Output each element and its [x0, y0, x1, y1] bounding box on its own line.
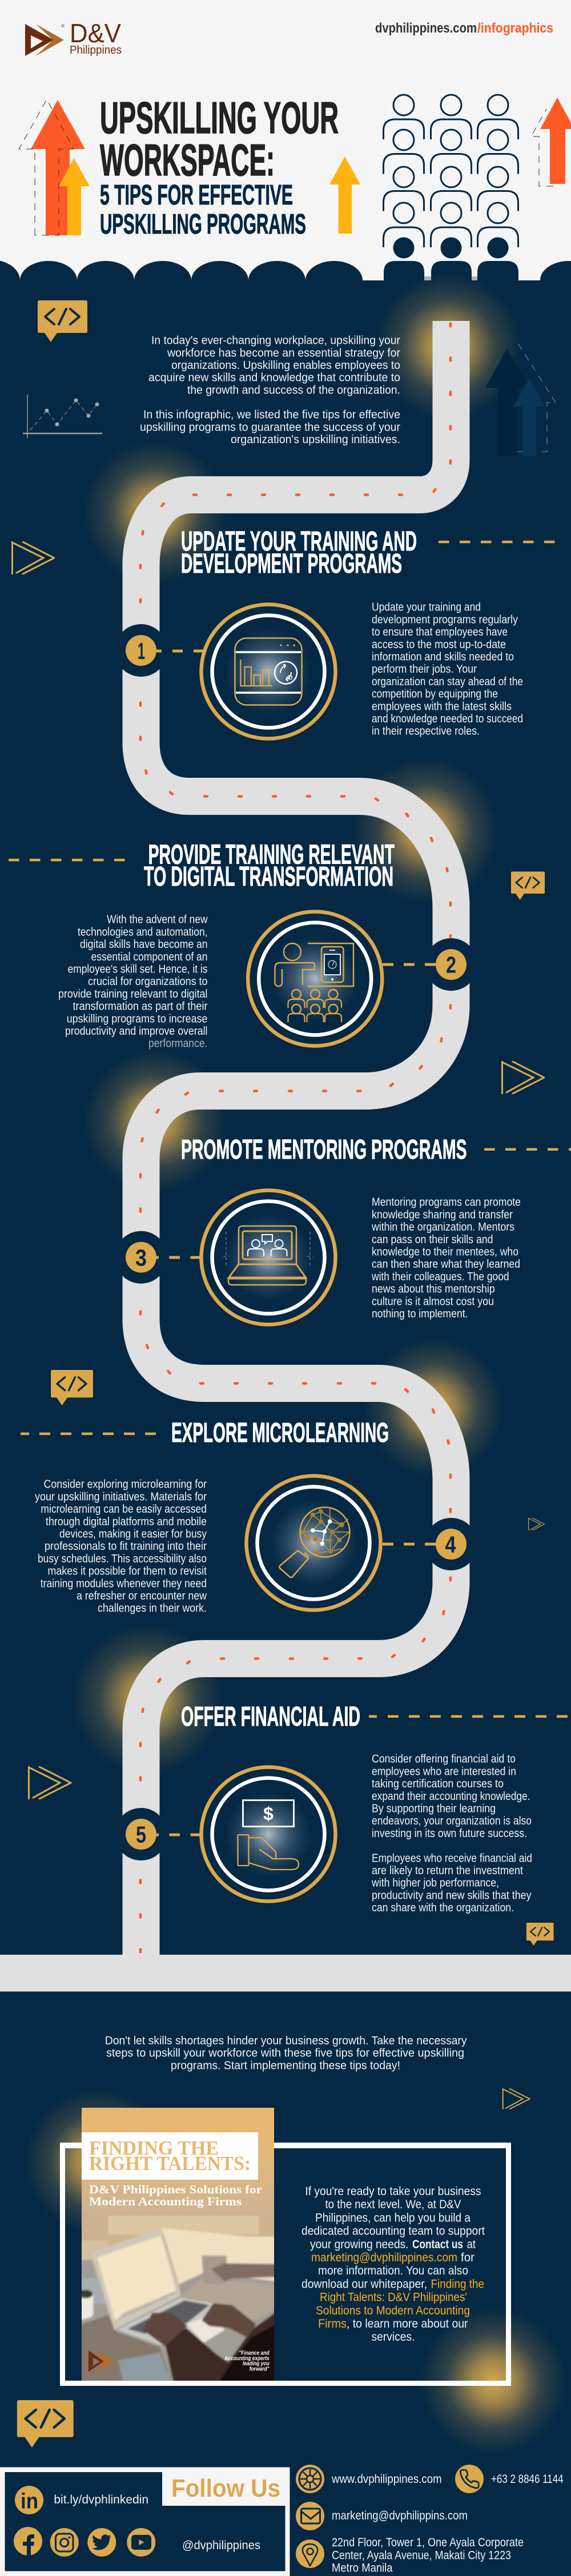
- website text: www.dvphilippines.com: [331, 2472, 442, 2486]
- cover title: RIGHT TALENTS:: [89, 2152, 251, 2175]
- intro text: acquire new skills and knowledge that contribute to: [148, 372, 400, 384]
- contact call-to-action text: [301, 2184, 485, 2344]
- contact call-to-action text: services.: [371, 2330, 415, 2344]
- icon: tip 5 financial aid: $: [263, 1803, 274, 1824]
- step 3 node: [115, 1231, 200, 1284]
- arrow centre: [329, 156, 360, 234]
- contact call-to-action text: at: [467, 2237, 476, 2251]
- scalloped ground: [0, 260, 571, 286]
- arrows left: [19, 99, 90, 235]
- intro text: organization's upskilling initiatives.: [231, 433, 400, 446]
- contact call-to-action text: your growing needs.: [310, 2237, 409, 2251]
- title: WORKSPACE:: [100, 135, 275, 185]
- body: tip 4: training modules whenever they need: [41, 1577, 207, 1590]
- icon: tip 2 teacher and audience: [248, 911, 382, 1046]
- contact call-to-action text: , to learn more about our: [347, 2317, 468, 2330]
- step 2 node: 2: [446, 951, 456, 978]
- people grid: [384, 95, 518, 283]
- heading: tip 5: OFFER FINANCIAL AID: [181, 1702, 360, 1732]
- cover subtitle: Modern Accounting Firms: [89, 2195, 242, 2208]
- contact call-to-action text: download our whitepaper,: [301, 2277, 427, 2290]
- body: tip 2: [58, 914, 208, 1050]
- cover photo: [82, 2216, 274, 2381]
- body: tip 2: provide training relevant to digital: [58, 988, 208, 1000]
- address text: Metro Manila: [332, 2561, 393, 2575]
- icon: linkedin: [15, 2486, 43, 2514]
- icon: instagram: [50, 2528, 79, 2557]
- body: tip 1: in their respective roles.: [372, 725, 480, 738]
- body: tip 4: busy schedules. This accessibility also: [38, 1553, 207, 1565]
- intro text: In this infographic, we listed the five tips for effective: [143, 409, 400, 421]
- cover title: [89, 2137, 251, 2175]
- body: tip 3: news about this mentorship: [372, 1283, 495, 1296]
- body: tip 5: productivity and new skills that they: [372, 1889, 531, 1902]
- linkedin link: bit.ly/dvphlinkedin: [54, 2493, 148, 2506]
- icon: phone: [455, 2465, 484, 2493]
- website url: /infographics: [477, 21, 553, 36]
- body: tip 4: makes it possible for them to revisit: [48, 1565, 207, 1578]
- logo: [25, 18, 122, 57]
- body: tip 2: technologies and automation,: [78, 926, 208, 938]
- address text: Center, Ayala Avenue, Makati City 1223: [332, 2549, 511, 2562]
- step 1 node: 1: [138, 638, 145, 664]
- icon: code bubble 4: [526, 1923, 554, 1946]
- icon: chevrons 5: [503, 2089, 530, 2109]
- body: tip 1: access to the most up-to-date: [372, 638, 506, 651]
- body: tip 1: competition by equipping the: [372, 688, 498, 701]
- title: UPSKILLING YOUR: [100, 93, 339, 143]
- body: tip 4: through digital platforms and mobile: [46, 1516, 207, 1528]
- cover logo: [89, 2350, 115, 2372]
- icon: facebook: [14, 2527, 42, 2555]
- body: tip 2: digital skills have become an: [80, 938, 208, 951]
- body: tip 4: microlearning can be easily accessed: [41, 1503, 207, 1516]
- body: tip 5: employees who are interested in: [372, 1765, 516, 1778]
- white frame: [60, 2143, 511, 2386]
- closing text: [105, 2035, 467, 2072]
- icon: tip 3 mentoring laptop: [201, 1190, 336, 1325]
- website url: [375, 21, 553, 36]
- step 4 node: [383, 1518, 477, 1570]
- body: tip 4: devices, making it easier for busy: [59, 1528, 207, 1541]
- icon: code bubble 5: [17, 2400, 74, 2448]
- body: tip 5: taking certification courses to: [372, 1778, 504, 1790]
- address text: 22nd Floor, Tower 1, One Ayala Corporate: [332, 2535, 524, 2549]
- whitepaper cover: [82, 2108, 274, 2381]
- icon: line chart: [23, 395, 102, 438]
- icon: twitter: [87, 2528, 116, 2557]
- contact call-to-action text: Contact us: [412, 2237, 463, 2251]
- contact call-to-action text: for: [461, 2251, 475, 2264]
- icon: website: [296, 2465, 324, 2493]
- step 3 node: 3: [135, 1245, 147, 1271]
- body: tip 2: employee's skill set. Hence, it is: [68, 963, 207, 975]
- intro text: upskilling programs to guarantee the success of your: [140, 421, 400, 433]
- step 2 node: [383, 938, 477, 991]
- body: tip 3: culture is it almost cost you: [372, 1295, 494, 1308]
- follow us heading: Follow Us: [171, 2474, 280, 2502]
- body: tip 1: organization can stay ahead of the: [372, 676, 523, 688]
- icon: tip 1 training dashboard: [201, 604, 336, 739]
- icon: tip 4 magnifier network: [247, 1476, 380, 1610]
- icon: tip 5 financial aid: [201, 1767, 336, 1902]
- body: tip 3: can then share what they learned: [372, 1258, 520, 1271]
- intro text: workforce has become an essential strategy for: [167, 347, 400, 359]
- icon: chevrons 2: [502, 1062, 544, 1094]
- icon: chevrons 4: [29, 1767, 71, 1799]
- body: tip 3: knowledge sharing and transfer: [372, 1208, 513, 1221]
- closing text: Don't let skills shortages hinder your business growth. Take the necessary: [105, 2035, 467, 2047]
- icon: email: [296, 2502, 324, 2530]
- cover tagline: "Finance and: [239, 2350, 270, 2356]
- body: tip 3: with their colleagues. The good: [371, 1271, 509, 1283]
- step 4 node: 4: [445, 1532, 456, 1558]
- cover tagline: forward": [250, 2366, 270, 2372]
- body: tip 5: expand their accounting knowledge.: [372, 1790, 530, 1803]
- logo: Philippines: [70, 44, 122, 57]
- cover title: FINDING THE: [89, 2137, 219, 2159]
- contact call-to-action text: Finding the: [431, 2277, 484, 2290]
- body: tip 1: to ensure that employees have: [372, 626, 508, 638]
- contact call-to-action text: Solutions to Modern Accounting: [316, 2304, 470, 2317]
- panel: contact details: [296, 2465, 564, 2575]
- contact call-to-action text: more information. You can also: [318, 2264, 468, 2277]
- road centre dashes: [140, 323, 451, 1952]
- body: tip 2: productivity and improve overall: [65, 1025, 208, 1038]
- body: tip 3: within the organization. Mentors: [371, 1221, 514, 1233]
- heading: tip 4: EXPLORE MICROLEARNING: [171, 1418, 389, 1448]
- intro text: the growth and success of the organization.: [187, 384, 400, 396]
- body: tip 1: perform their jobs. Your: [372, 663, 477, 676]
- icon: chevrons 3: [529, 1518, 545, 1530]
- body: tip 1: [372, 601, 523, 738]
- body: tip 1: Update your training and: [372, 601, 481, 614]
- contact call-to-action text: dedicated accounting team to support: [301, 2224, 485, 2238]
- winding road: [0, 321, 571, 1992]
- cover subtitle: [89, 2183, 262, 2208]
- body: tip 1: and knowledge needed to succeed: [372, 713, 523, 725]
- body: tip 4: [35, 1478, 207, 1615]
- body: tip 4: Consider exploring microlearning for: [43, 1478, 207, 1491]
- body: tip 3: Mentoring programs can promote: [372, 1196, 521, 1209]
- heading: tip 2: TO DIGITAL TRANSFORMATION: [144, 862, 393, 892]
- body: tip 4: professionals to fit training into their: [45, 1540, 207, 1553]
- body: tip 4: a refresher or encounter new: [77, 1590, 207, 1602]
- icon: code bubble 1: [38, 300, 87, 342]
- body: tip 3: can pass on their skills and: [372, 1233, 493, 1246]
- contact call-to-action text: Philippines, can help you build a: [315, 2211, 471, 2224]
- heading: tip 2: [144, 839, 395, 892]
- heading: tip 1: DEVELOPMENT PROGRAMS: [181, 549, 402, 579]
- body: tip 5: can share with the organization.: [372, 1902, 514, 1914]
- body: tip 2: crucial for organizations to: [88, 975, 208, 988]
- intro text: organizations. Upskilling enables employees to: [171, 359, 400, 372]
- body: tip 4: your upskilling initiatives. Materials for: [35, 1490, 207, 1503]
- body: tip 5: are likely to return the investment: [372, 1864, 523, 1877]
- icon: code bubble 3: [51, 1370, 93, 1405]
- step 5 node: 5: [136, 1822, 146, 1848]
- body: tip 1: development programs regularly: [372, 613, 518, 626]
- body: tip 5: Employees who receive financial aid: [372, 1852, 532, 1864]
- cover subtitle: D&V Philippines Solutions for: [89, 2183, 262, 2196]
- body: tip 2: upskilling programs to increase: [67, 1012, 208, 1025]
- body: tip 5: endeavors, your organization is also: [372, 1815, 532, 1827]
- body: tip 5: investing in its own future success.: [372, 1827, 527, 1840]
- body: tip 5: with higher job performance,: [371, 1877, 499, 1890]
- step 1 node: [115, 624, 203, 677]
- body: tip 2: essential component of an: [91, 951, 208, 963]
- logo: ®: [61, 23, 65, 29]
- body: tip 5: Consider offering financial aid to: [372, 1753, 516, 1766]
- body: tip 1: information and skills needed to: [372, 651, 514, 664]
- icon: linkedin: in: [21, 2490, 38, 2514]
- contact call-to-action text: to the next level. We, at D&V: [325, 2197, 461, 2211]
- body: tip 1: employees with the latest skills: [372, 700, 512, 713]
- body: tip 4: challenges in their work.: [98, 1602, 207, 1615]
- contact call-to-action text: Right Talents: D&V Philippines': [320, 2290, 467, 2304]
- title: 5 TIPS FOR EFFECTIVE: [100, 180, 293, 211]
- cover title box: [82, 2132, 258, 2180]
- panel: header: [0, 0, 571, 286]
- email text: marketing@dvphilippins.com: [332, 2509, 468, 2522]
- body: tip 2: With the advent of new: [107, 914, 208, 926]
- body: tip 2: performance.: [148, 1038, 208, 1050]
- body: tip 3: [371, 1196, 521, 1320]
- body: tip 3: knowledge to their mentees, who: [372, 1246, 518, 1259]
- heading: tip 2: PROVIDE TRAINING RELEVANT: [148, 839, 395, 870]
- body: tip 2: transformation as part of their: [73, 1000, 208, 1013]
- body: tip 5: [371, 1753, 532, 1914]
- panel: follow us: [0, 2467, 290, 2576]
- closing text: programs. Start implementing these tips today!: [171, 2059, 400, 2072]
- intro text: [140, 335, 400, 446]
- icon: location pin: [296, 2539, 324, 2568]
- website url: dvphilippines.com: [375, 21, 477, 36]
- icon: code bubble 2: [511, 871, 545, 900]
- body: tip 3: nothing to implement.: [372, 1308, 468, 1320]
- icon: chevrons 1: [13, 542, 54, 574]
- title: [100, 93, 339, 240]
- cover tagline: [224, 2350, 270, 2372]
- address text: [332, 2535, 524, 2575]
- heading: tip 1: [181, 527, 417, 579]
- cover tagline: leading you: [243, 2361, 270, 2367]
- contact call-to-action text: marketing@dvphilippines.com: [311, 2251, 457, 2264]
- intro text: In today's ever-changing workplace, upskilling your: [151, 335, 400, 347]
- social handle: @dvphilippines: [182, 2538, 260, 2552]
- step 5 node: [115, 1808, 200, 1860]
- icon: dim arrows right: [485, 344, 556, 456]
- arrow right: [531, 98, 571, 186]
- body: tip 5: By supporting their learning: [372, 1802, 496, 1815]
- logo: D&V: [70, 18, 121, 48]
- icon: youtube: [127, 2528, 155, 2557]
- contact call-to-action text: If you're ready to take your business: [305, 2184, 481, 2198]
- closing text: steps to upskill your workforce with these five tips for effective upskilling: [106, 2047, 464, 2060]
- contact call-to-action text: Firms: [318, 2317, 347, 2330]
- cover tagline: Accounting experts: [224, 2356, 270, 2362]
- title: UPSKILLING PROGRAMS: [100, 209, 306, 240]
